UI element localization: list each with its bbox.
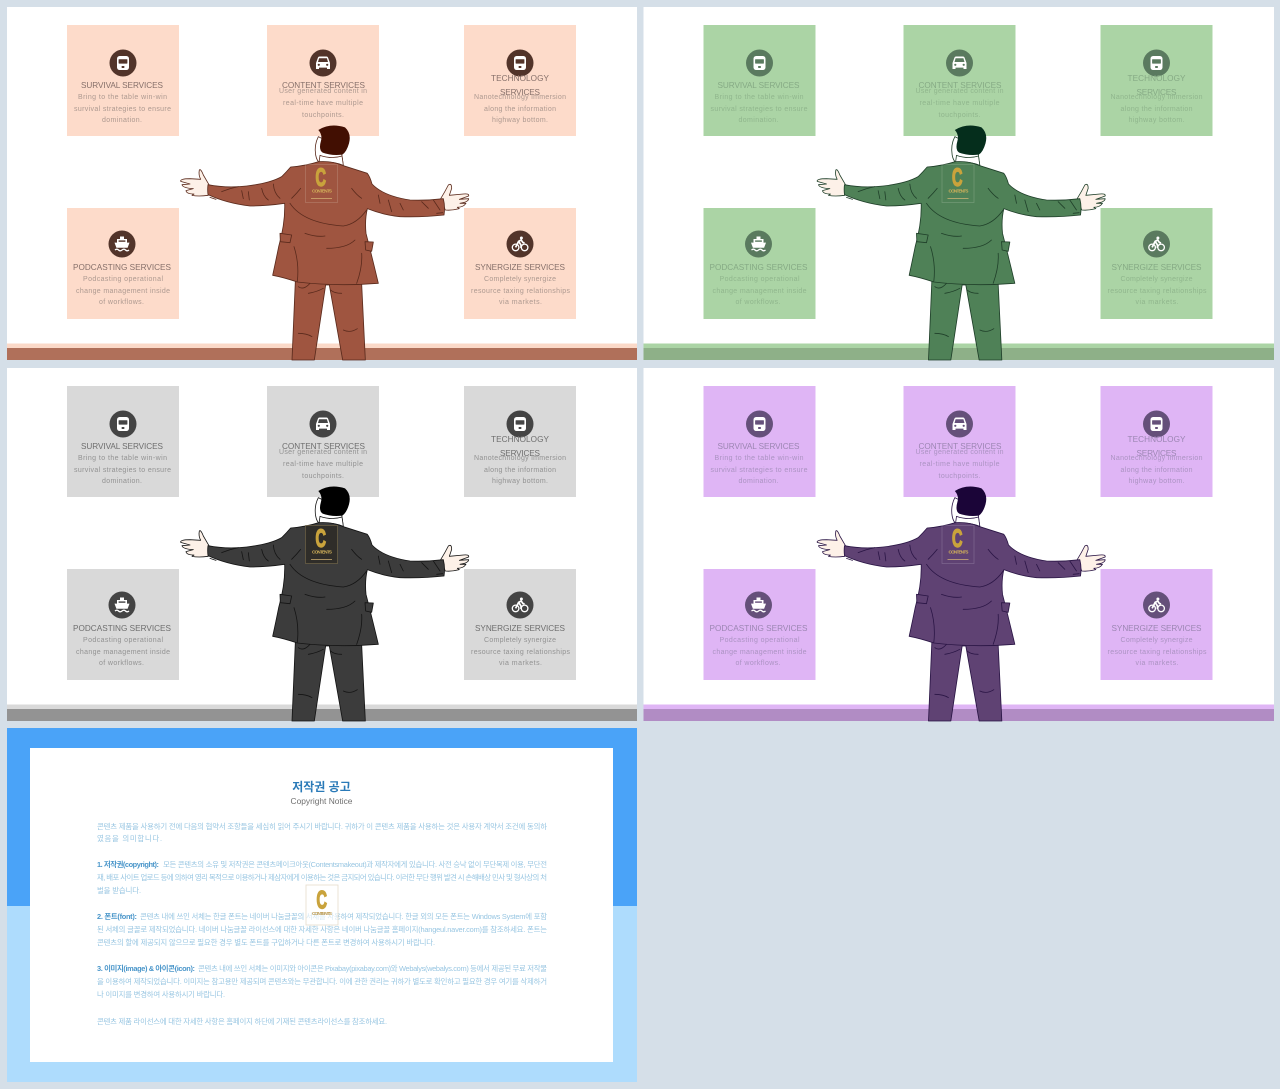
panel: purple suit slide	[644, 368, 1274, 721]
card: podcasting services: Podcasting operational	[83, 276, 163, 283]
logo: contents mark: C	[316, 526, 326, 553]
logo: contents mark: C	[316, 888, 327, 915]
text block: copyright terms: 콘텐츠의 할에 제공되지 않으므로 필요한 경우 별도 폰트를 구입하거나 다른 폰트로 변경하여 사용하시기 바랍니다.	[97, 938, 435, 947]
heading: copyright notice	[291, 779, 353, 806]
floor band	[644, 704, 1274, 721]
card: podcasting services: of workflows.	[736, 299, 781, 306]
card: podcasting services: change management inside	[76, 288, 170, 295]
card: synergize services: SYNERGIZE SERVICES	[475, 624, 566, 633]
text block: copyright terms: 2. 폰트(font):	[97, 912, 137, 921]
floor band	[644, 344, 1274, 360]
panel: green suit slide	[644, 7, 1274, 360]
card: content services: CONTENT SERVICES	[282, 442, 366, 451]
floor band	[7, 704, 637, 721]
heading: copyright notice: 저작권 공고	[292, 779, 351, 794]
card: survival services: SURVIVAL SERVICES	[718, 442, 800, 451]
card: content services: real-time have multiple	[920, 100, 1000, 107]
card: podcasting services: of workflows.	[99, 299, 144, 306]
card: technology services: Nanotechnology immersion	[1110, 94, 1203, 101]
text block: copyright terms: 콘텐츠 제품을 사용하기 전에 다음의 협약서 조항들을 세심히 읽어 주시기 바랍니다. 귀하가 이 콘텐츠 제품을 사용하는 것은 사용자 계약서 조건에 동의하	[97, 822, 547, 831]
logo: contents mark: C	[952, 165, 963, 192]
card: podcasting services: PODCASTING SERVICES	[710, 624, 808, 633]
figure: man with open arms	[817, 487, 1105, 721]
logo: contents mark: C	[952, 526, 963, 553]
card: content services: User generated content in	[279, 88, 367, 95]
card: podcasting services: Podcasting operational	[83, 637, 163, 644]
card: survival services	[67, 386, 179, 497]
card: podcasting services: change management inside	[712, 288, 807, 295]
card: survival services: Bring to the table win-win	[714, 94, 804, 101]
card: podcasting services	[704, 208, 816, 319]
logo: contents mark: CONTENTS	[312, 188, 332, 194]
card: survival services: Bring to the table win-win	[78, 94, 167, 101]
text block: copyright terms: 된 서체의 글꼴로 제작되었습니다. 네이버 나눔글꼴 라이선스에 대한 자세한 사항은 네이버 나눔글꼴 홈페이지(hangeul.naver.com)를 참조하세요. 폰트는	[97, 925, 547, 934]
card: podcasting services	[67, 569, 179, 680]
card: podcasting services: change management inside	[712, 649, 807, 656]
card: podcasting services	[67, 208, 179, 319]
card: survival services: domination.	[738, 117, 779, 124]
card: technology services	[464, 25, 576, 136]
card: survival services: SURVIVAL SERVICES	[81, 442, 164, 451]
card: synergize services: via markets.	[499, 660, 542, 667]
logo: contents mark: CONTENTS	[312, 911, 333, 917]
card: podcasting services: PODCASTING SERVICES	[710, 263, 808, 272]
logo: contents mark: CONTENTS	[948, 188, 968, 194]
card: survival services	[67, 25, 179, 136]
card: synergize services: resource taxing relationships	[1108, 649, 1207, 656]
card: synergize services: resource taxing relationships	[1108, 288, 1207, 295]
card: synergize services: SYNERGIZE SERVICES	[1112, 263, 1202, 272]
logo: contents mark	[942, 526, 974, 564]
card: podcasting services: Podcasting operational	[720, 637, 800, 644]
card: technology services: SERVICES	[500, 88, 541, 97]
card: survival services	[704, 386, 816, 497]
card: content services	[267, 25, 379, 136]
card: podcasting services: PODCASTING SERVICES	[73, 263, 172, 272]
logo: contents mark	[942, 164, 974, 202]
card: technology services: Nanotechnology immersion	[1110, 455, 1203, 462]
card: survival services: survival strategies to ensure	[74, 106, 171, 113]
logo: contents mark: C	[316, 165, 326, 192]
card: synergize services: Completely synergize	[1120, 637, 1193, 644]
card: content services: User generated content in	[916, 88, 1004, 95]
card: synergize services: resource taxing relationships	[471, 288, 570, 295]
card: content services: real-time have multiple	[283, 461, 363, 468]
figure: man with open arms	[817, 126, 1105, 360]
card: technology services: along the information	[484, 106, 556, 113]
card: synergize services	[1100, 208, 1212, 319]
card: technology services: TECHNOLOGY	[1128, 74, 1186, 83]
text block: copyright terms: 모든 콘텐츠의 소유 및 저작권은 콘텐츠메이크아웃(Contentsmakeout)과 제작자에게 있습니다. 사전 승낙 없이 무단복제 이용, 무단전	[163, 860, 547, 869]
card: synergize services	[1100, 569, 1212, 680]
card: podcasting services: of workflows.	[99, 660, 144, 667]
card: podcasting services: Podcasting operational	[720, 276, 800, 283]
panel: copyright notice	[7, 728, 637, 1082]
card: technology services: TECHNOLOGY	[491, 435, 550, 444]
logo: contents mark	[306, 526, 338, 564]
card: survival services: Bring to the table win-win	[78, 455, 167, 462]
card: technology services: highway bottom.	[492, 478, 548, 485]
card: podcasting services: of workflows.	[736, 660, 781, 667]
card: content services: CONTENT SERVICES	[918, 442, 1002, 451]
card: synergize services: via markets.	[1136, 660, 1179, 667]
card: synergize services: via markets.	[1136, 299, 1179, 306]
card: synergize services: Completely synergize	[484, 276, 556, 283]
card: podcasting services	[704, 569, 816, 680]
card: technology services	[1100, 386, 1212, 497]
card: survival services: domination.	[102, 478, 142, 485]
text block: copyright terms: 였음을 의미합니다.	[97, 834, 162, 843]
text block: copyright terms	[97, 822, 547, 1026]
card: synergize services: SYNERGIZE SERVICES	[1112, 624, 1202, 633]
card: content services	[904, 25, 1016, 136]
card: synergize services	[464, 208, 576, 319]
card: survival services	[704, 25, 816, 136]
logo: contents mark: CONTENTS	[312, 550, 332, 554]
card: content services: User generated content in	[916, 449, 1004, 456]
figure: man with open arms	[181, 487, 469, 721]
card: technology services: SERVICES	[1136, 449, 1177, 458]
card: technology services: Nanotechnology immersion	[474, 455, 566, 462]
card: survival services: survival strategies to ensure	[710, 106, 808, 113]
card: content services	[267, 386, 379, 497]
card: survival services: domination.	[102, 117, 142, 124]
heading: copyright notice: Copyright Notice	[291, 796, 353, 806]
text block: copyright terms: 3. 이미지(image) & 아이콘(icon):	[97, 964, 195, 973]
card: technology services: SERVICES	[1136, 88, 1177, 97]
panel: brown suit slide	[7, 7, 637, 360]
card: content services	[904, 386, 1016, 497]
card: survival services: survival strategies to ensure	[710, 467, 808, 474]
figure: man with open arms	[181, 126, 469, 360]
card: technology services: along the information	[484, 467, 556, 474]
card: survival services: survival strategies to ensure	[74, 467, 171, 474]
logo: contents mark	[306, 164, 338, 202]
text block: copyright terms: 1. 저작권(copyright):	[97, 860, 159, 869]
card: content services: real-time have multiple	[283, 100, 363, 107]
card: technology services: highway bottom.	[1128, 117, 1185, 124]
card: podcasting services: PODCASTING SERVICES	[73, 624, 172, 633]
panel: grey suit slide	[7, 368, 637, 721]
text block: copyright terms: 콘텐츠 제품 라이선스에 대한 자세한 사항은 홈페이지 하단에 기재된 콘텐츠라이선스를 참조하세요.	[97, 1017, 387, 1026]
card: content services: touchpoints.	[938, 112, 981, 119]
card: technology services: highway bottom.	[1128, 478, 1185, 485]
card: content services: touchpoints.	[938, 473, 981, 480]
text block: copyright terms: 콘텐츠 내에 쓰인 서체는 이미지와 아이콘은 Pixabay(pixabay.com)와 Webalys(webalys.com) 등에서 제공된 무료 저작물	[198, 964, 547, 973]
logo: contents mark: CONTENTS	[948, 550, 968, 554]
card: technology services: Nanotechnology immersion	[474, 94, 566, 101]
card: technology services: highway bottom.	[492, 117, 548, 124]
card: content services: touchpoints.	[302, 112, 344, 119]
card: synergize services: Completely synergize	[1120, 276, 1193, 283]
card: survival services: SURVIVAL SERVICES	[81, 81, 164, 90]
text block: copyright terms: 나 이미지를 변경하여 사용하시기 바랍니다.	[97, 990, 225, 999]
card: technology services	[1100, 25, 1212, 136]
card: technology services: along the information	[1120, 467, 1193, 474]
card: content services: touchpoints.	[302, 473, 344, 480]
card: technology services: TECHNOLOGY	[491, 74, 550, 83]
floor band	[7, 344, 637, 360]
card: synergize services: resource taxing relationships	[471, 649, 570, 656]
card: synergize services: Completely synergize	[484, 637, 556, 644]
card: technology services: SERVICES	[500, 449, 541, 458]
text block: copyright terms: 을 이용하여 제작되었습니다. 이미지는 참고용만 제공되며 콘텐츠와는 무관합니다. 이에 관한 권리는 귀하가 별도로 확인하고 필요한 경우 여기를 삭제하거	[97, 977, 547, 986]
card: technology services	[464, 386, 576, 497]
text block: copyright terms: 벌을 받습니다.	[97, 886, 141, 895]
text block: copyright terms: 콘텐츠 내에 쓰인 서체는 한글 폰트는 네이버 나눔글꼴의 서체를 사용하여 제작되었습니다. 한글 외의 모든 폰트는 Windows System에 포함	[140, 912, 547, 921]
card: survival services: SURVIVAL SERVICES	[718, 81, 800, 90]
card: content services: CONTENT SERVICES	[918, 81, 1002, 90]
card: podcasting services: change management inside	[76, 649, 170, 656]
card: survival services: Bring to the table win-win	[714, 455, 804, 462]
card: technology services: along the information	[1120, 106, 1193, 113]
card: survival services: domination.	[738, 478, 779, 485]
card: technology services: TECHNOLOGY	[1128, 435, 1186, 444]
card: synergize services: SYNERGIZE SERVICES	[475, 263, 566, 272]
text block: copyright terms: 재, 배포 사이트 업로드 등에 의하여 영리 목적으로 이용하거나 제삼자에게 이용하는 것은 금지되어 있습니다. 이러한 무단 행위 발견 시 손해배상 민사 및 형사상의 처	[97, 873, 547, 882]
card: content services: CONTENT SERVICES	[282, 81, 366, 90]
card: content services: User generated content in	[279, 449, 367, 456]
card: synergize services	[464, 569, 576, 680]
card: content services: real-time have multiple	[920, 461, 1000, 468]
logo: contents mark	[306, 885, 338, 925]
card: synergize services: via markets.	[499, 299, 542, 306]
